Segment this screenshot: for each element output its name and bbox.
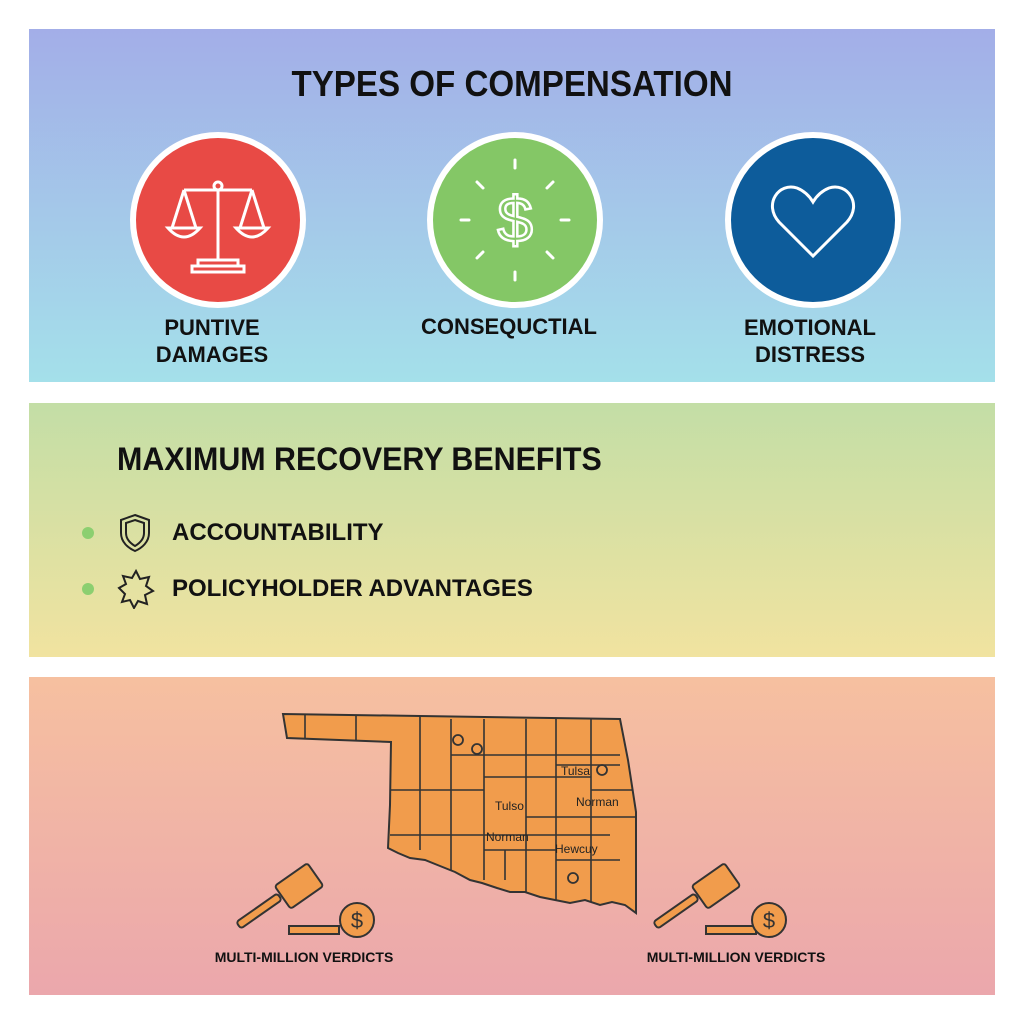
map: oklahoma: Norman (576, 795, 619, 809)
icon: gavel left (236, 863, 375, 938)
panel: verdicts map (29, 677, 995, 995)
map: oklahoma (282, 713, 637, 915)
panel: maximum recovery benefits (29, 403, 995, 657)
map: oklahoma: Tulsa (561, 764, 590, 778)
item: accountability (82, 514, 384, 552)
map: oklahoma: Hewcuy (555, 842, 598, 856)
label: emotional distress (744, 315, 876, 367)
label: consequctial: CONSEQUCTIAL (421, 314, 597, 339)
icon: gavel right: $ (763, 908, 775, 933)
icon: scales (130, 132, 306, 308)
panel: types of compensation (29, 29, 995, 382)
label: puntive damages: PUNTIVE (164, 315, 260, 340)
icon: dollar: $ (497, 184, 533, 256)
icon: heart (725, 132, 901, 308)
label: emotional distress: DISTRESS (755, 342, 865, 367)
map: oklahoma: Norman (486, 830, 529, 844)
item: policyholder advantages: POLICYHOLDER ADVANTAGES (172, 575, 533, 602)
label: verdicts right: MULTI-MILLION VERDICTS (647, 949, 825, 965)
title: TYPES OF COMPENSATION (291, 63, 733, 104)
item: accountability: ACCOUNTABILITY (172, 519, 384, 546)
icon: gavel left: $ (351, 908, 363, 933)
label: puntive damages: DAMAGES (156, 342, 268, 367)
heading: MAXIMUM RECOVERY BENEFITS (117, 441, 602, 477)
icon: dollar (427, 132, 603, 308)
item: policyholder advantages (82, 569, 533, 609)
map: oklahoma: Tulso (495, 799, 524, 813)
label: emotional distress: EMOTIONAL (744, 315, 876, 340)
label: puntive damages (156, 315, 268, 367)
icon: gavel right (653, 863, 787, 938)
label: verdicts left: MULTI-MILLION VERDICTS (215, 949, 393, 965)
